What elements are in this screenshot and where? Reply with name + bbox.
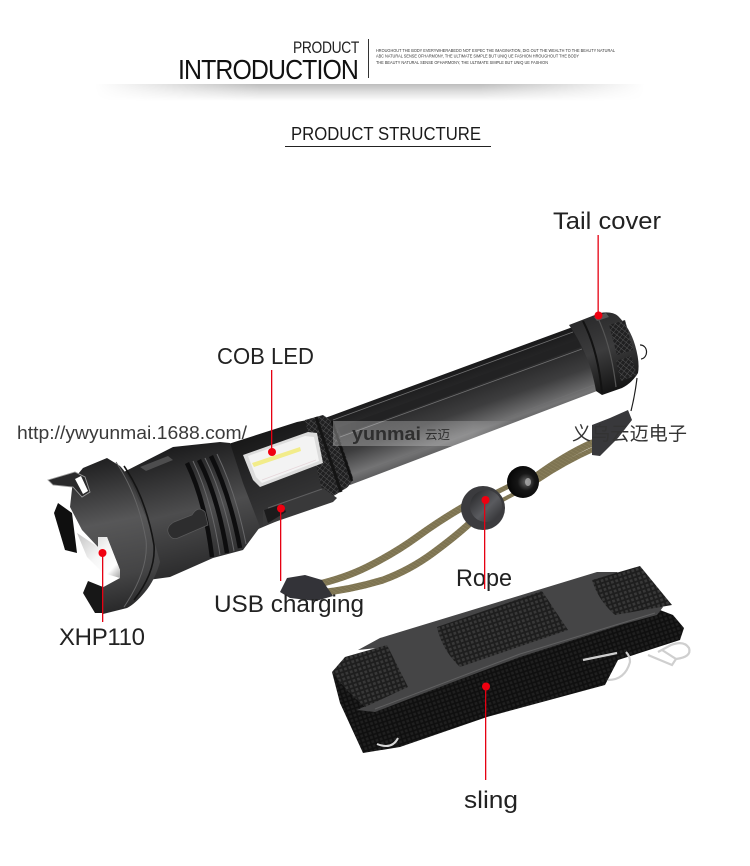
callout: XHP110: XHP110 [59,624,145,651]
USB charging port cover [263,488,337,526]
head bezel [48,458,160,614]
webbing end left [332,645,408,707]
small descriptive text: HROUGHOUT THE BODY EVERYWHERABEDO NOT EXPEC THE IMAGINATION, DIG OUT THE WEALTH TO THE BEAUTY NATURAL [376,48,616,53]
mid body [222,420,337,530]
title: PRODUCT: PRODUCT [293,39,359,57]
bezel tooth bottom [83,581,103,613]
bead highlight [525,478,531,486]
small descriptive text: THE BEAUTY NATURAL SENSE OFHARMONY, THE ULTIMATE SIMPLE BUT UNIQ UE FASHION [376,60,548,65]
callout: sling: sling [464,787,518,814]
watermark: yunmai: yunmai [352,424,421,444]
sling strap [332,566,689,753]
bezel tooth left [54,503,77,553]
vertical divider [368,39,369,78]
stopper face [470,490,502,522]
watermark band [333,421,520,446]
cord loop [631,345,647,411]
callout: rope: Rope [456,565,512,592]
finned neck [112,442,260,580]
pad edge highlight [375,613,655,709]
section heading: product structure: PRODUCT STRUCTURE [291,124,481,144]
XHP110 lens [77,533,120,578]
header: product introduction [178,39,616,85]
wrist rope [280,345,647,601]
callout: tail cover [553,208,661,320]
rope strap stopper [592,410,632,456]
swivel ring under strap [377,738,398,746]
flashlight [48,312,639,614]
title: INTRODUCTION: INTRODUCTION [178,54,358,85]
pad mesh centre [437,591,568,667]
header shadow [116,84,623,98]
tube body [325,326,600,485]
callout: COB LED: COB LED [217,343,314,369]
watermark: yunmai Chinese: 云迈 [425,428,450,442]
small descriptive text: ABC NATURAL SENSE OFHARMONY, THE ULTIMATE SIMPLE BUT UNIQ UE FASHION HROUGHOUT THE BODY [376,54,579,58]
webbing end right [592,566,672,615]
black bead [507,466,539,498]
bezel tooth top [48,472,90,497]
callout: sling [464,682,518,814]
round stopper [461,486,505,530]
callout: rope [456,496,512,592]
callout: COB LED [217,343,314,456]
callout: XHP110 [59,549,145,651]
watermark: URL: http://ywyunmai.1688.com/ [17,422,248,443]
small descriptive text [376,48,616,65]
knurled collar [305,415,353,497]
callout: tail cover: Tail cover [553,208,661,235]
COB LED window [243,432,323,487]
lower webbing [332,610,684,753]
shoulder pad [357,572,663,712]
rope strands [315,443,594,593]
watermark: Chinese company name: 义乌云迈电子 [572,423,687,445]
tooth gap highlight [75,476,88,494]
callout: USB charging: USB charging [214,591,364,618]
callout: USB charging [214,504,364,618]
metal hooks [583,643,689,680]
tail cap [569,312,639,395]
rope end clip [280,575,333,601]
